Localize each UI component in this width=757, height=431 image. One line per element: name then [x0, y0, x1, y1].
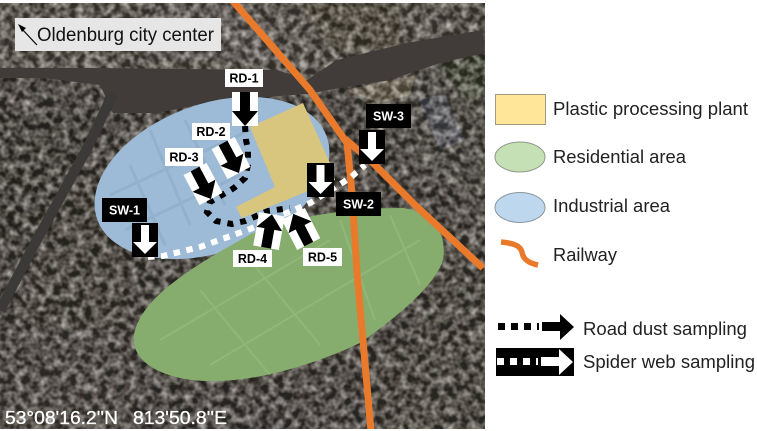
marker: RD-3	[165, 148, 222, 205]
panel: plastic processing plant	[236, 103, 335, 218]
marker: SW-2	[307, 163, 381, 216]
text: city center label: Oldenburg city center	[37, 24, 214, 46]
legend: road dust sampling: Road dust sampling	[583, 318, 747, 339]
legend: spider web sampling	[496, 348, 755, 376]
river	[0, 30, 485, 113]
marker: RD-5: RD-5	[308, 250, 337, 264]
legend: industrial area: Industrial area	[553, 195, 671, 216]
legend: residential area	[495, 142, 687, 172]
marker: RD-1	[225, 69, 263, 126]
coordinates text: 53°08'16.2''N	[5, 407, 118, 428]
panel: satellite map	[0, 0, 485, 431]
panel: industrial area ellipse	[94, 97, 330, 260]
legend: plastic processing plant: Plastic processing plant	[553, 98, 748, 119]
marker: RD-4: RD-4	[238, 252, 267, 266]
canal	[0, 93, 113, 310]
south-east industrial bank	[345, 53, 485, 200]
residential street grid	[160, 215, 420, 375]
spider web sampling route	[148, 165, 365, 257]
legend: railway	[501, 242, 618, 265]
marker: SW-3	[359, 104, 411, 164]
legend: plastic processing plant	[496, 94, 748, 124]
marker: SW-1	[102, 198, 158, 257]
marker: RD-3: RD-3	[169, 150, 199, 164]
panel: residential area	[134, 208, 444, 381]
railway	[232, 0, 483, 431]
marker: RD-2	[192, 123, 250, 179]
north bank	[0, 3, 485, 80]
industrial street grid	[110, 120, 250, 245]
coordinates text: 813'50.8''E	[133, 407, 227, 428]
marker: RD-4	[233, 212, 285, 267]
legend: road dust sampling	[498, 314, 747, 340]
texture	[0, 3, 485, 429]
coordinates text	[5, 407, 227, 428]
legend: residential area: Residential area	[553, 146, 687, 167]
legend: railway: Railway	[553, 244, 618, 265]
road dust sampling route	[207, 126, 290, 224]
legend: spider web sampling: Spider web sampling	[583, 351, 755, 372]
panel: legend	[495, 94, 755, 376]
marker: SW-1: SW-1	[109, 204, 140, 218]
legend: industrial area	[495, 192, 671, 222]
marker: RD-2: RD-2	[196, 125, 226, 139]
arrow: north-west to city center	[18, 24, 37, 45]
marker: RD-1: RD-1	[229, 72, 259, 86]
south-east residential	[370, 210, 485, 429]
marker: SW-3: SW-3	[373, 110, 404, 124]
marker: RD-5	[282, 208, 342, 266]
marker: SW-2: SW-2	[343, 198, 374, 212]
callout: Oldenburg city center	[15, 18, 221, 51]
